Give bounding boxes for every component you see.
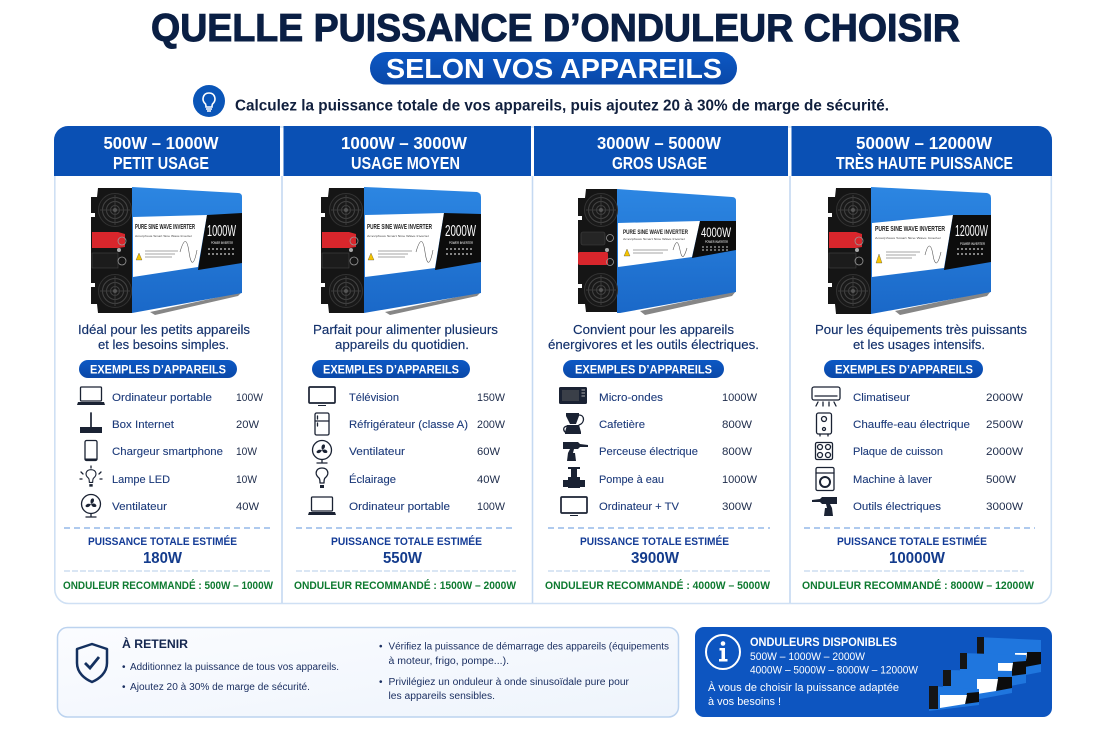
subtitle pill: SELON VOS APPAREILS: [386, 53, 722, 84]
appliance list: 10W: [236, 474, 257, 486]
icon: light bulb: [193, 85, 225, 117]
right bullets: les appareils sensibles.: [388, 691, 495, 702]
total power: [580, 535, 729, 567]
appliance list: Climatiseur: [853, 392, 910, 404]
appliance list: 100W: [477, 501, 505, 513]
description: et les usages intensifs.: [853, 337, 985, 352]
description: Idéal pour les petits appareils: [78, 322, 250, 337]
total power: PUISSANCE TOTALE ESTIMÉE: [580, 535, 729, 548]
icon: drill: [563, 442, 588, 461]
column header: [792, 126, 1052, 176]
heading: À RETENIR: [122, 636, 188, 651]
column header: [534, 126, 788, 176]
total power: 180W: [143, 550, 183, 567]
appliance list: 10W: [236, 446, 257, 458]
inverter 2000W: [321, 187, 481, 315]
icon: microwave: [559, 387, 587, 404]
column header: 500W – 1000W: [104, 133, 219, 153]
column header: PETIT USAGE: [113, 153, 209, 173]
inverter 2000W: 2000W: [445, 223, 477, 240]
inverter range image: [929, 637, 1041, 711]
appliance list: Télévision: [349, 392, 399, 404]
appliance list: Ventilateur: [349, 446, 405, 458]
icon: fan: [82, 494, 100, 517]
appliance list: 100W: [236, 392, 263, 404]
icon: fridge: [315, 413, 329, 435]
examples pill: EXEMPLES D’APPAREILS: [323, 362, 459, 376]
right bullets: à moteur, frigo, pompe...).: [388, 656, 509, 667]
column header: [54, 126, 280, 176]
left bullets: Additionnez la puissance de tous vos appareils.: [130, 662, 339, 673]
inverter 4000W: [578, 189, 736, 315]
appliance list: 40W: [477, 474, 500, 486]
column header: 3000W – 5000W: [597, 133, 721, 153]
inverter 4000W: PURE SINE WAVE INVERTER: [623, 229, 688, 236]
description: [313, 322, 498, 352]
icon: laptop: [77, 387, 105, 405]
available text: 4000W – 5000W – 8000W – 12000W: [750, 664, 919, 676]
icon: water pump: [563, 467, 585, 488]
inverter 12000W: PURE SINE WAVE INVERTER: [875, 224, 945, 233]
icon: fan: [312, 440, 332, 463]
description: [78, 322, 250, 352]
column header: 5000W – 12000W: [856, 133, 992, 153]
description: [548, 322, 759, 352]
available text: 500W – 1000W – 2000W: [750, 651, 866, 663]
inverter 1000W: [91, 187, 242, 315]
available text: À vous de choisir la puissance adaptée: [708, 681, 899, 694]
appliance list: 200W: [477, 419, 505, 431]
appliance list: Ventilateur: [112, 501, 167, 513]
column header: GROS USAGE: [612, 153, 707, 173]
inverter 1000W: POWER INVERTER: [211, 240, 233, 245]
inverter 12000W: POWER INVERTER: [960, 241, 985, 246]
description: Parfait pour alimenter plusieurs: [313, 322, 498, 337]
panel: à retenir: [58, 628, 678, 717]
table card: [54, 126, 1052, 604]
description: [815, 322, 1027, 352]
appliance list: Chauffe-eau électrique: [853, 419, 970, 431]
description: énergivores et les outils électriques.: [548, 337, 759, 352]
intro text: Calculez la puissance totale de vos appareils, puis ajoutez 20 à 30% de marge de sécurité.: [235, 98, 889, 114]
appliance list: 300W: [722, 501, 752, 513]
right bullets: Vérifiez la puissance de démarrage des appareils (équipements: [388, 642, 669, 652]
column header: [284, 126, 531, 176]
appliance list: Micro-ondes: [599, 392, 663, 404]
inverter 2000W: POWER INVERTER: [449, 240, 473, 245]
appliance list: [77, 387, 263, 517]
icon: washing machine: [816, 468, 834, 490]
icon: laptop: [308, 497, 336, 515]
appliance list: Cafetière: [599, 419, 645, 431]
examples pill: EXEMPLES D’APPAREILS: [90, 362, 226, 376]
column header: USAGE MOYEN: [351, 153, 460, 173]
appliance list: Ordinateur + TV: [599, 501, 679, 513]
appliance list: Outils électriques: [853, 501, 941, 513]
icon: power tool: [812, 497, 837, 516]
icon: coffee maker: [564, 413, 584, 434]
appliance list: Réfrigérateur (classe A): [349, 419, 468, 431]
description: et les besoins simples.: [98, 337, 229, 352]
icon: LED lamp: [80, 466, 102, 487]
total power: 3900W: [631, 550, 680, 567]
appliance list: 1000W: [722, 392, 757, 404]
icon: water heater: [816, 413, 832, 436]
icon: router: [80, 413, 102, 433]
total power: [88, 535, 237, 567]
appliance list: 1000W: [722, 474, 757, 486]
appliance list: 2500W: [986, 419, 1023, 431]
examples pill: EXEMPLES D’APPAREILS: [575, 362, 712, 376]
right bullets: •: [379, 677, 383, 688]
appliance list: 3000W: [986, 501, 1023, 513]
inverter 2000W: PURE SINE WAVE INVERTER: [367, 222, 432, 231]
appliance list: [308, 387, 505, 515]
appliance list: 2000W: [986, 446, 1023, 458]
icon: television: [309, 387, 335, 406]
recommendation: ONDULEUR RECOMMANDÉ : 1500W – 2000W: [294, 579, 517, 592]
inverter 1000W: Amorphous Smart Sine Wave Inverter: [135, 234, 192, 238]
appliance list: 20W: [236, 419, 259, 431]
description: Convient pour les appareils: [573, 322, 734, 337]
inverter 12000W: Amorphous Smart Sine Wave Inverter: [875, 236, 941, 240]
total power: 550W: [383, 550, 423, 567]
left bullets: •: [122, 662, 126, 673]
column header: TRÈS HAUTE PUISSANCE: [836, 152, 1013, 173]
appliance list: 150W: [477, 392, 505, 404]
appliance list: 60W: [477, 446, 500, 458]
panel: petit usage: [54, 126, 280, 592]
left bullets: Ajoutez 20 à 30% de marge de sécurité.: [130, 682, 310, 693]
icon: cooktop: [816, 442, 832, 460]
appliance list: Chargeur smartphone: [112, 446, 223, 458]
left bullets: •: [122, 682, 126, 693]
available text: [708, 637, 919, 708]
inverter 12000W: [828, 187, 991, 315]
available text: ONDULEURS DISPONIBLES: [750, 637, 897, 649]
recommendation: ONDULEUR RECOMMANDÉ : 8000W – 12000W: [802, 579, 1035, 592]
appliance list: Perceuse électrique: [599, 446, 698, 458]
total power: PUISSANCE TOTALE ESTIMÉE: [837, 535, 987, 548]
total power: [837, 535, 987, 567]
inverter 4000W: Amorphous Smart Sine Wave Inverter: [623, 237, 685, 241]
panel: gros usage: [534, 126, 788, 592]
appliance list: Ordinateur portable: [349, 501, 450, 513]
inverter 4000W: 4000W: [701, 224, 732, 240]
total power: 10000W: [889, 550, 946, 567]
panel: très haute puissance: [792, 126, 1052, 592]
icon: air conditioner: [812, 387, 840, 406]
appliance list: 800W: [722, 419, 752, 431]
inverter 2000W: Amorphous Smart Sine Wave Inverter: [367, 234, 429, 238]
appliance list: Ordinateur portable: [112, 392, 212, 404]
total power: PUISSANCE TOTALE ESTIMÉE: [88, 535, 237, 548]
right bullets: •: [379, 642, 383, 652]
appliance list: [812, 387, 1023, 516]
appliance list: 40W: [236, 501, 259, 513]
appliance list: Plaque de cuisson: [853, 446, 943, 458]
available text: à vos besoins !: [708, 696, 781, 708]
appliance list: Éclairage: [349, 473, 396, 486]
examples pill: EXEMPLES D’APPAREILS: [835, 362, 973, 376]
total power: PUISSANCE TOTALE ESTIMÉE: [331, 535, 482, 548]
left bullets: [122, 662, 339, 693]
appliance list: Machine à laver: [853, 474, 932, 486]
right bullets: Privilégiez un onduleur à onde sinusoïdale pure pour: [388, 677, 630, 688]
title: QUELLE PUISSANCE D’ONDULEUR CHOISIR: [151, 7, 960, 50]
icon: shield check: [77, 644, 107, 682]
recommendation: ONDULEUR RECOMMANDÉ : 500W – 1000W: [63, 579, 274, 592]
inverter 4000W: POWER INVERTER: [705, 240, 728, 244]
right bullets: [379, 642, 669, 702]
recommendation: ONDULEUR RECOMMANDÉ : 4000W – 5000W: [545, 579, 771, 592]
panel: usage moyen: [284, 126, 531, 592]
inverter 12000W: 12000W: [955, 223, 988, 240]
total power: [331, 535, 482, 567]
appliance list: Box Internet: [112, 419, 175, 431]
icon: info: [706, 635, 740, 669]
appliance list: 500W: [986, 474, 1016, 486]
panel: onduleurs disponibles: [695, 627, 1052, 717]
appliance list: Lampe LED: [112, 474, 170, 486]
icon: smartphone: [85, 440, 97, 460]
description: appareils du quotidien.: [335, 337, 469, 352]
description: Pour les équipements très puissants: [815, 322, 1027, 337]
appliance list: [559, 387, 757, 516]
appliance list: Pompe à eau: [599, 474, 664, 486]
icon: monitor: [561, 497, 587, 516]
icon: bulb: [316, 468, 328, 488]
appliance list: 800W: [722, 446, 752, 458]
appliance list: 2000W: [986, 392, 1023, 404]
column header: 1000W – 3000W: [341, 133, 467, 153]
inverter 1000W: PURE SINE WAVE INVERTER: [135, 222, 195, 231]
inverter 1000W: 1000W: [207, 223, 237, 240]
